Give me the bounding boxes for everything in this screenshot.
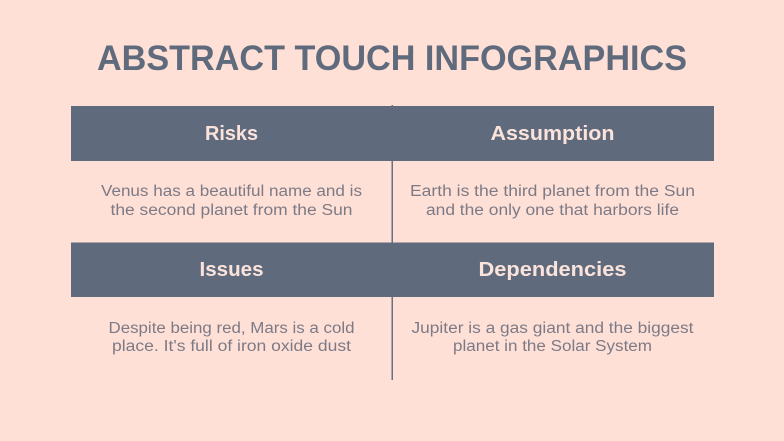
text block: issues: Despite being red, Mars is a cold <box>108 320 354 337</box>
text block: risks: the second planet from the Sun <box>110 202 352 219</box>
panel: risks <box>71 106 714 219</box>
heading: risks: Risks <box>205 123 258 145</box>
heading: assumption: Assumption <box>490 123 614 145</box>
text block: assumption: and the only one that harbors life <box>426 202 679 219</box>
text block: dependencies: Jupiter is a gas giant and the biggest <box>412 320 694 337</box>
text block: assumption: Earth is the third planet from the Sun <box>410 183 695 200</box>
text block: dependencies: planet in the Solar System <box>453 338 652 355</box>
panel: assumption <box>410 123 695 219</box>
header bar: issues and dependencies <box>71 242 714 297</box>
text block: issues: place. It's full of iron oxide dust <box>112 338 352 355</box>
heading: issues: Issues <box>200 259 264 281</box>
panel: dependencies <box>412 259 694 355</box>
heading: dependencies: Dependencies <box>478 259 626 281</box>
header bar: risks and assumption <box>71 106 714 161</box>
vertical divider <box>392 105 393 380</box>
panel: issues <box>71 242 714 355</box>
title: ABSTRACT TOUCH INFOGRAPHICS <box>97 39 687 78</box>
text block: risks: Venus has a beautiful name and is <box>101 183 362 200</box>
